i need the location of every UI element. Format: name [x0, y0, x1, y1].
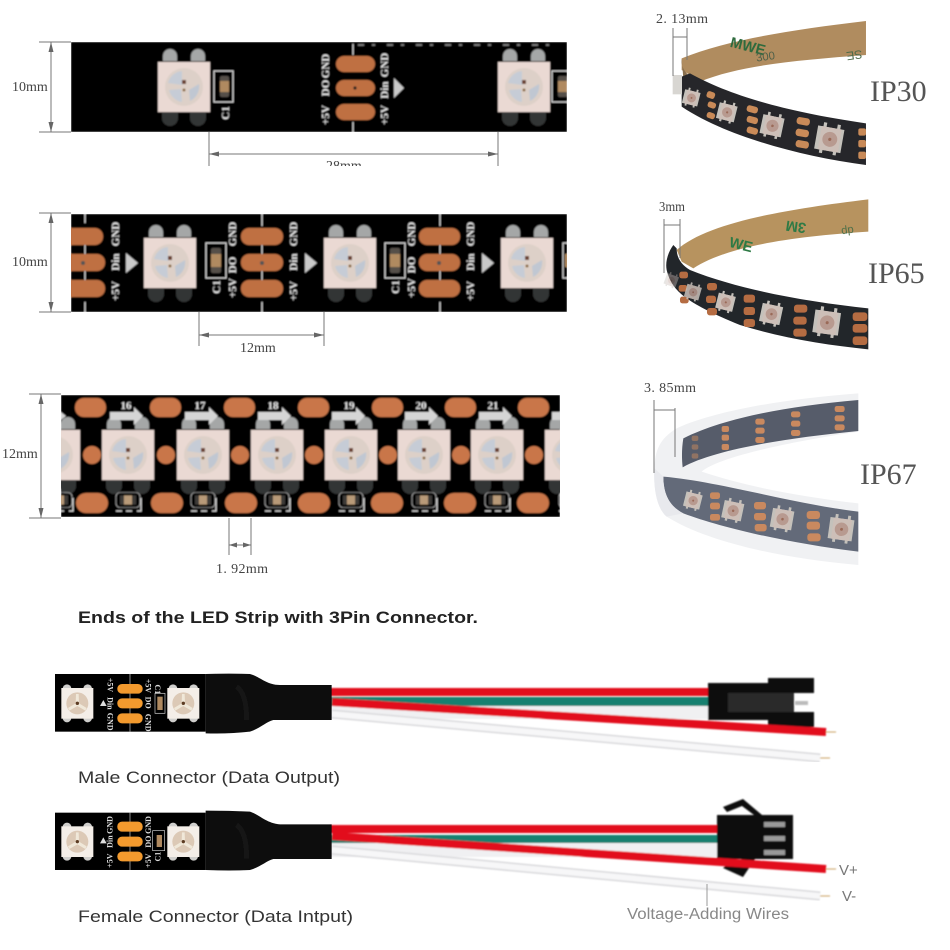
callout: voltage-adding wires: Voltage-Adding Wires — [627, 906, 789, 923]
dimension: 12mm height: 12mm — [2, 447, 38, 462]
dimension: 3mm thickness: 3mm — [659, 200, 685, 215]
strip board: 28mm pitch: +5V — [320, 105, 332, 125]
strip board: 12mm pitch: Din — [288, 253, 300, 271]
panel: 30 LED strip with dimensions — [12, 42, 571, 174]
panel: IP67 silicone sleeve strip — [644, 381, 917, 565]
photo: curved IP65 strip with tape backing — [663, 199, 868, 349]
strip board: 12mm pitch: Din — [465, 253, 477, 271]
strip end with heat-shrink sleeve: GND — [144, 816, 153, 834]
photo: curved IP65 strip with tape backing: dp — [840, 224, 855, 237]
heading: connector section: Ends of the LED Strip with 3Pin Connector. — [78, 609, 478, 627]
strip board: 28mm pitch: C1 — [220, 106, 232, 120]
panel: male connector — [55, 674, 836, 787]
dimension: 10mm height: 10mm — [12, 255, 48, 270]
label: IP67: IP67 — [860, 458, 917, 491]
panel: IP30 bare strip — [656, 12, 927, 165]
dimension: 3.85mm thickness: 3. 85mm — [644, 381, 696, 396]
strip board: 12mm pitch: +5V — [465, 281, 477, 301]
strip board: 12mm pitch: +5V — [110, 281, 122, 301]
strip end with heat-shrink sleeve: GND — [106, 816, 115, 834]
strip board: 12mm pitch: GND — [406, 222, 418, 246]
wires and male plug — [330, 678, 836, 758]
strip end with heat-shrink sleeve: C1 — [153, 684, 162, 694]
dimension: 1.92mm pad width: 1. 92mm — [216, 562, 268, 577]
strip end with heat-shrink sleeve: +5V — [143, 679, 152, 693]
strip board: 12mm pitch: GND — [465, 222, 477, 246]
dimension: 10mm height — [12, 213, 71, 312]
strip board: 28mm pitch: GND — [320, 54, 332, 78]
photo: curved IP65 strip with tape backing: 3M — [785, 217, 807, 235]
label: IP30: IP30 — [870, 75, 927, 108]
label: V+: V+ — [839, 862, 858, 879]
strip end with heat-shrink sleeve: +5V — [105, 678, 114, 692]
strip board: numbered LEDs: 21 — [488, 400, 498, 412]
strip end with heat-shrink sleeve: Din — [106, 835, 115, 848]
wires and female plug — [330, 799, 836, 896]
strip board: numbered LEDs: 18 — [268, 400, 279, 412]
strip end with heat-shrink sleeve — [55, 674, 332, 733]
strip end with heat-shrink sleeve: C1 — [154, 852, 163, 862]
dimension: 2.13mm thickness: 2. 13mm — [656, 12, 708, 27]
strip end with heat-shrink sleeve: GND — [105, 713, 114, 731]
photo: curved IP65 strip with tape backing: WE — [727, 235, 754, 256]
strip end with heat-shrink sleeve: GND — [143, 714, 152, 732]
strip board: 12mm pitch — [60, 214, 583, 312]
dimension: 28mm pitch: 28mm — [326, 159, 362, 174]
strip board: 12mm pitch: GND — [227, 222, 239, 246]
panel: IP65 coated strip — [659, 199, 925, 349]
strip board: 12mm pitch: C1 — [211, 280, 223, 294]
panel: 144 LED strip with dimensions — [2, 394, 597, 577]
strip end with heat-shrink sleeve: Din — [105, 697, 114, 710]
strip end with heat-shrink sleeve: +5V — [106, 853, 115, 868]
dimension: 12mm height — [2, 394, 61, 518]
strip board: 28mm pitch — [71, 42, 571, 132]
dimension: 1.92mm pad width — [216, 518, 268, 577]
strip end with heat-shrink sleeve: DO — [143, 697, 152, 709]
strip board: 28mm pitch: GND — [379, 53, 391, 77]
strip board: 28mm pitch: Din — [379, 81, 391, 99]
strip board: numbered LEDs: 20 — [416, 400, 427, 412]
strip board: 28mm pitch: DO — [320, 79, 332, 96]
dimension: 28mm pitch — [208, 132, 498, 166]
strip board: 12mm pitch: C1 — [390, 280, 402, 294]
photo: curved IP30 strip with tape backing: 300 — [755, 50, 776, 65]
photo: curved IP30 strip with tape backing — [673, 21, 866, 165]
dimension: 3mm thickness — [659, 200, 685, 273]
strip board: 12mm pitch: Din — [110, 253, 122, 271]
dimension: 10mm height — [12, 42, 71, 132]
label: V-: V- — [842, 888, 856, 905]
dimension: 10mm height: 10mm — [12, 80, 48, 95]
photo: curved IP30 strip with tape backing: MWE — [728, 35, 767, 59]
strip board: 12mm pitch: +5V — [288, 281, 300, 301]
strip board: 12mm pitch: +5V — [227, 278, 239, 298]
strip board: 12mm pitch: DO — [406, 256, 418, 273]
panel: female connector — [55, 799, 858, 926]
label: IP65: IP65 — [868, 257, 925, 290]
caption: male connector: Male Connector (Data Output) — [78, 768, 340, 787]
strip end with heat-shrink sleeve: DO — [144, 836, 153, 848]
photo: curved IP67 strip in silicone tube — [654, 393, 858, 565]
strip board: 28mm pitch: +5V — [379, 105, 391, 125]
dimension: 12mm pitch — [199, 312, 324, 356]
strip board: 12mm pitch: GND — [288, 222, 300, 246]
strip board: 12mm pitch: +5V — [406, 278, 418, 298]
strip board: 12mm pitch: GND — [110, 222, 122, 246]
panel: 60 LED strip with dimensions — [12, 213, 583, 356]
dimension: 2.13mm thickness — [656, 12, 708, 76]
strip board: numbered LEDs: 17 — [194, 400, 206, 412]
strip board: numbered LEDs: 19 — [344, 400, 355, 412]
dimension: 3.85mm thickness — [644, 381, 696, 473]
photo: curved IP30 strip with tape backing: SE — [845, 47, 863, 63]
dimension: 12mm pitch: 12mm — [240, 341, 276, 356]
caption: female connector: Female Connector (Data Intput) — [78, 907, 353, 926]
strip board: 12mm pitch: DO — [227, 256, 239, 273]
strip end with heat-shrink sleeve: +5V — [144, 853, 153, 868]
strip board: numbered LEDs: 16 — [120, 400, 132, 412]
strip board: numbered LEDs — [61, 395, 560, 517]
strip end with heat-shrink sleeve — [55, 811, 332, 870]
